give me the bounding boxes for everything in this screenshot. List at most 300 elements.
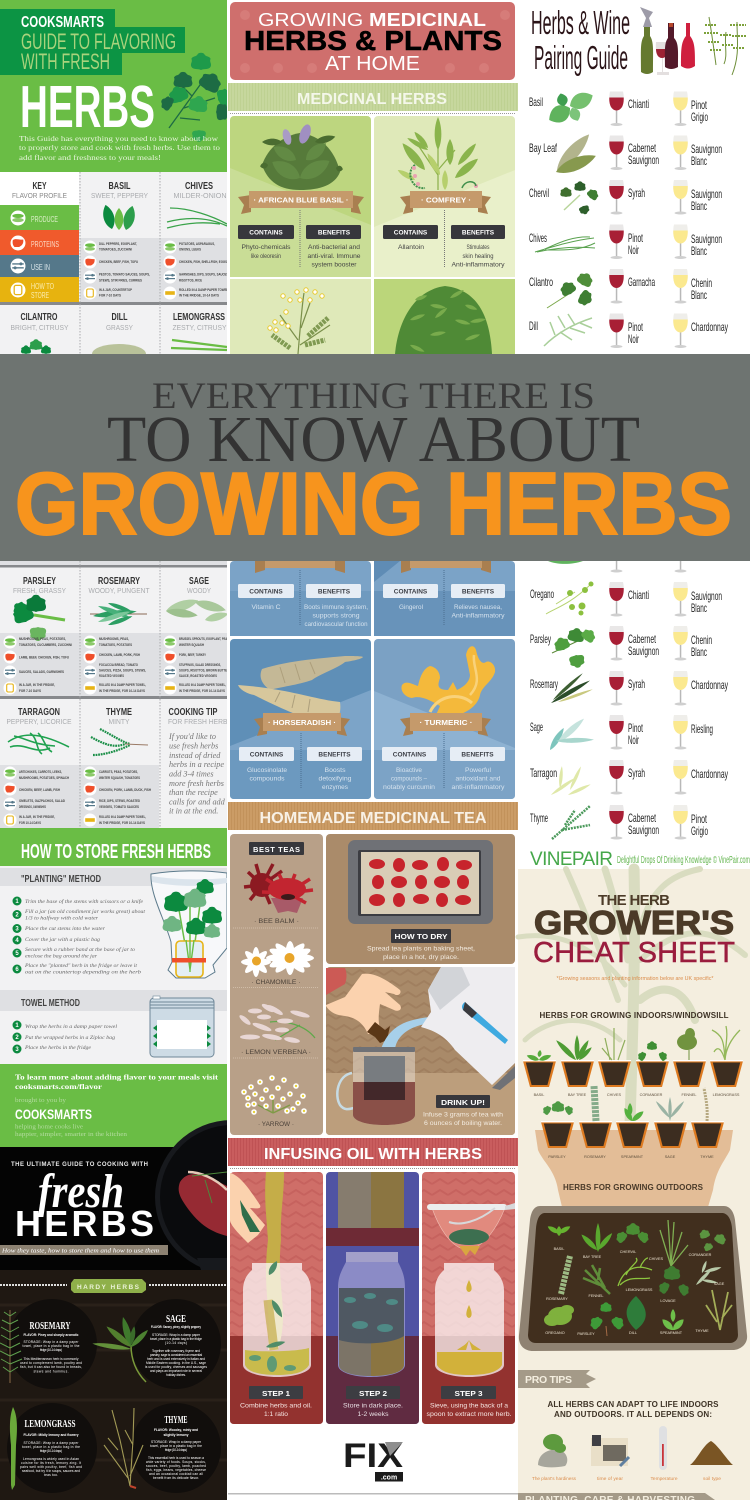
row: rosemary: Rosemary — [530, 677, 558, 691]
towel steps: 1 — [15, 1023, 19, 1029]
cooking tip: it in at the end. — [169, 806, 218, 816]
header: growing medicinal herbs and plants at home: HERBS & PLANTS — [244, 25, 502, 56]
title banner — [0, 354, 750, 561]
step 3 — [422, 1172, 515, 1424]
row: cilantro: Cilantro — [529, 275, 553, 289]
labels: SAGE — [714, 1282, 725, 1286]
icon: chives — [167, 208, 227, 228]
card copy: Gingerol — [399, 605, 423, 611]
row: dill: Dill — [529, 319, 538, 333]
herb: tarragon: IN A JAR, IN THE FRIDGE, — [19, 815, 55, 819]
row: cilantro — [529, 269, 712, 308]
key: use in — [0, 255, 79, 277]
herb card: rosemary: used to complement lamb, poultry and — [20, 1361, 82, 1365]
herb: thyme: CARROTS, PEAS, POTATOES, — [99, 770, 138, 774]
towel steps: Place the herbs in the fridge — [24, 1046, 92, 1051]
label — [391, 929, 451, 943]
herb card: sage: Together with rosemary, thyme and — [152, 1349, 200, 1353]
labels: CORIANDER — [640, 1093, 663, 1097]
herb card: lemongrass: LEMONGRASS — [24, 1418, 76, 1430]
row: sage: Pinot — [628, 721, 643, 735]
labels: THYME — [700, 1155, 714, 1159]
title: HERBS: HERBS — [20, 74, 155, 140]
section band: medicinal herbs: MEDICINAL HERBS — [297, 91, 447, 108]
herb card: sage: STORAGE: Wrap in a damp paper — [152, 1333, 201, 1337]
panel: herbs and wine pairing guide, upper crop: Herbs & Wine — [531, 4, 630, 41]
towel steps: Put the wrapped herbs in a Ziploc bag — [24, 1036, 116, 1041]
planting steps: enclose the bag around the jar — [25, 954, 97, 960]
ribbon label — [400, 191, 491, 214]
step label: STEP 3 — [454, 1389, 482, 1398]
card: turmeric — [374, 639, 515, 799]
row: tarragon: Syrah — [628, 766, 645, 780]
planting steps — [12, 896, 146, 976]
row: parsley: Chenin — [691, 633, 712, 647]
hero title: HERBS: HERBS — [15, 1203, 154, 1244]
labels: OREGANO — [545, 1331, 565, 1335]
cooking tip: add 3-4 times — [169, 770, 214, 778]
column: chives: RISOTTOS, RICE — [179, 278, 202, 282]
labels — [548, 1155, 714, 1159]
column: chives: IN THE FRIDGE, 10-14 DAYS — [179, 294, 219, 298]
raised bed — [519, 1206, 747, 1351]
outdoor pots — [541, 1086, 724, 1159]
contains box: CONTAINS — [394, 230, 428, 236]
intro text: This Guide has everything you need to know about how — [19, 134, 219, 143]
card copy: detoxifying — [318, 776, 352, 782]
step copy — [343, 1404, 403, 1418]
icon: thyme sprig — [104, 1408, 143, 1486]
icon: rosemary sprig — [0, 1310, 22, 1383]
card copy — [383, 768, 504, 791]
card copy: Powerful — [465, 768, 491, 774]
icon: chamomile — [241, 940, 314, 977]
icon: turmeric root — [401, 646, 495, 715]
step label: STEP 1 — [262, 1389, 290, 1398]
herb: rosemary: CHICKEN, LAMB, PORK, FISH — [99, 653, 140, 657]
name: · CHAMOMILE · — [252, 979, 300, 986]
herb card: sage: (10-14 days) — [165, 1341, 187, 1345]
contains box — [383, 225, 438, 239]
card: feverfew, cropped — [230, 279, 371, 354]
planting steps: Secure with a rubber band at the base of jar to — [25, 948, 136, 953]
labels: CHIVES — [649, 1257, 664, 1261]
indoor pots row 1 — [523, 1026, 743, 1097]
row: sage — [530, 715, 713, 752]
subheading: towel method — [0, 990, 227, 1011]
step copy: Store in dark place. — [343, 1404, 403, 1410]
instructions — [423, 1112, 503, 1127]
card copy — [252, 605, 504, 628]
panel: the herb grower's cheat sheet — [518, 869, 750, 1500]
herb: tarragon: TARRAGON — [18, 707, 60, 718]
column: basil: DILL PEPPERS, EGGPLANT, — [99, 242, 137, 246]
row: thyme — [530, 805, 708, 840]
herb card: sage: and plays an important role in several — [150, 1369, 202, 1373]
title lines: GUIDE TO FLAVORING — [21, 29, 176, 54]
planting steps: 6 — [15, 967, 19, 973]
column: chives: CHIVES — [185, 181, 213, 192]
herb: parsley: SAUCES, SALADS, GARNISHES — [19, 670, 64, 674]
herb: sage: IN THE FRIDGE, FOR 10-14 DAYS — [179, 689, 225, 693]
tip labels: time of year — [597, 1476, 624, 1481]
card: comfrey: Stimulates — [466, 245, 490, 251]
ribbon label — [238, 191, 364, 214]
heading: outdoors: HERBS FOR GROWING OUTDOORS — [563, 1183, 704, 1192]
icon: cilantro — [547, 270, 595, 308]
logo: fix.com: .com — [381, 1474, 397, 1482]
herb card: thyme: wide variety of foods. Soups, stocks, — [146, 1460, 206, 1464]
card: horseradish — [230, 639, 371, 799]
planting steps: 2 — [15, 912, 19, 918]
herb: thyme: MINTY — [108, 717, 130, 726]
row: parsley — [530, 626, 712, 669]
title — [533, 892, 735, 969]
herb: rosemary: MUSHROOMS, PEAS, — [99, 637, 129, 641]
herb: tarragon: DRESSINGS, GARNISHES — [19, 805, 46, 809]
card copy: Boots immune system, — [304, 605, 368, 611]
jar base above band — [338, 1172, 404, 1228]
intro text — [19, 134, 220, 162]
intro text: to properly store and cook with fresh herbs. Use them to — [19, 143, 220, 152]
icon: thyme — [91, 729, 148, 755]
cooking tip: more fresh herbs — [169, 779, 224, 788]
footer: cooksmarts credit — [0, 1064, 227, 1147]
panel: how to dry — [326, 834, 515, 964]
icon: sealed jar with herbs — [338, 1252, 405, 1377]
card: african blue basil: Phyto-chemicals — [242, 245, 290, 251]
herb card: sage: herb and is used extensively in Italian and — [147, 1357, 205, 1361]
herb: rosemary: ROLLED IN A DAMP PAPER TOWEL, — [99, 683, 146, 687]
section band: medicinal herbs — [228, 83, 518, 111]
intro text: add flavor and freshness to your meals! — [19, 153, 161, 162]
card: african blue basil: anti-viral. Immune — [308, 254, 361, 260]
title line 1: EVERYTHING THERE IS — [152, 376, 595, 417]
row: chervil: Sauvignon — [691, 187, 722, 201]
key: produce: PRODUCE — [31, 215, 58, 224]
icon: jar — [243, 1260, 311, 1377]
ribbon: planting, care and harvesting — [518, 1493, 715, 1500]
herb: sage: ROLLED IN A DAMP PAPER TOWEL, — [179, 683, 226, 687]
herb card: thyme: FLAVOR: Woodsy, minty and — [154, 1428, 198, 1432]
title: GROWER'S — [534, 904, 734, 941]
cooking tip: instead of dried — [169, 751, 221, 760]
panel: drink up — [326, 967, 515, 1135]
herb: sage: SOUPS, RISOTTOS, BROWN BUTTER — [179, 668, 229, 672]
towel steps: 2 — [15, 1035, 19, 1041]
icon: rock with plant — [538, 1434, 567, 1467]
card: comfrey: Anti-inflammatory — [452, 262, 504, 268]
labels: FENNEL — [682, 1093, 696, 1097]
row: chives: Sauvignon — [691, 232, 722, 246]
labels: BASIL — [534, 1093, 544, 1097]
planting steps: 3 — [15, 926, 19, 932]
step label — [249, 1386, 303, 1399]
instructions — [367, 946, 475, 961]
header: growing medicinal herbs and plants at home — [230, 2, 515, 80]
row: cilantro: Blanc — [691, 288, 707, 302]
herb card: sage: is used for poultry, cheeses and sausages — [145, 1365, 207, 1369]
row: bay leaf: Cabernet — [628, 141, 656, 155]
icon: baking sheet with flowers — [348, 840, 493, 924]
icon: herbs in bagged jar — [151, 871, 227, 978]
herb card: thyme: benefit from its delicate flavor. — [153, 1476, 199, 1480]
row: bay leaf: Bay Leaf — [529, 141, 557, 155]
panel: cooksmarts herb guide, upper crop: KEY — [32, 181, 47, 192]
labels: PARSLEY — [577, 1332, 595, 1336]
benefits box: BENEFITS — [462, 230, 495, 236]
subheading: planting method: "PLANTING" METHOD — [21, 873, 101, 885]
herb card: rosemary: towel, place in a plastic bag in the — [22, 1344, 80, 1348]
herb: sage — [164, 576, 229, 694]
herb: parsley: FOR 7-10 DAYS — [19, 689, 41, 693]
labels: BAY TREE — [583, 1255, 602, 1259]
ribbon label — [400, 713, 491, 736]
key: proteins: PROTEINS — [31, 240, 59, 249]
ribbon fragments — [255, 561, 491, 573]
labels: THYME — [695, 1329, 709, 1333]
icon: tea mug with infuser — [337, 1047, 415, 1125]
herb details background — [80, 238, 227, 302]
card copy: supports strong — [312, 614, 360, 620]
ribbon label: · COMFREY · — [421, 196, 471, 204]
herb: sage: PORK, BEEF, TURKEY — [179, 653, 206, 657]
column: basil: BASIL — [108, 181, 130, 192]
herb: tarragon — [4, 707, 72, 826]
icon: sieve with herbs — [427, 1203, 515, 1256]
labels — [545, 1247, 725, 1336]
step copy: 1-2 weeks — [358, 1412, 388, 1418]
subheading: towel method: TOWEL METHOD — [21, 997, 80, 1009]
partial row: previous pair — [548, 558, 686, 572]
box labels: BENEFITS — [318, 752, 351, 758]
icon: lemongrass — [10, 1407, 17, 1490]
disclaimer: *Growing seasons and planting information below are UK specific* — [556, 976, 714, 982]
box labels: CONTAINS — [393, 752, 427, 758]
herb card: rosemary: stews and hummus. — [34, 1370, 69, 1374]
herb: rosemary: TOMATOES, POTATOES — [99, 643, 132, 647]
row: chervil: Blanc — [691, 199, 707, 213]
box labels — [239, 747, 362, 761]
column: chives: POTATOES, ASPARAGUS, — [179, 242, 215, 246]
herb card: sage: towel, place in a plastic bag in the fridge — [150, 1337, 202, 1341]
panel: best teas — [230, 834, 323, 1135]
herb card: lemongrass: cuisine for its fresh, lemony zing. It — [21, 1461, 81, 1465]
column: chives: ROLLED IN A DAMP PAPER TOWEL, — [179, 288, 229, 292]
icon: basil plant — [260, 123, 343, 190]
icon: tarragon — [550, 766, 591, 797]
row: bay leaf: Sauvignon — [628, 153, 659, 167]
ribbon: pro tips — [518, 1370, 596, 1388]
row: dill — [529, 314, 728, 348]
cards: parsley and ginger, cropped — [230, 561, 515, 636]
icon: chives — [535, 237, 595, 252]
herb: thyme: THYME — [106, 707, 132, 718]
key: use in: USE IN — [31, 263, 50, 272]
row: thyme: Thyme — [530, 811, 548, 825]
herb: parsley: MUSHROOMS, PEAS, POTATOES, — [19, 637, 66, 641]
panel: how to store fresh herbs — [0, 828, 227, 1147]
planting steps: 4 — [15, 938, 19, 944]
herb card: thyme: fish, eggs, beans, vegetables, cheese — [146, 1468, 206, 1472]
logo: fix.com: FIX — [343, 1437, 403, 1475]
herb: parsley — [4, 576, 72, 694]
instructions: place in a hot, dry place. — [383, 955, 459, 961]
step label — [346, 1386, 400, 1399]
column: basil: IN A JAR, COUNTERTOP — [99, 288, 132, 292]
key cell — [0, 172, 79, 205]
herb card: thyme: sauces, beef, poultry, lamb, poached — [146, 1464, 206, 1468]
cooking tip: calls for and add — [169, 798, 226, 806]
labels: PARSLEY — [548, 1155, 566, 1159]
icon: skillet with steak — [155, 1120, 309, 1274]
herb: thyme: WINTER SQUASH, TOMATOES — [99, 776, 140, 780]
herb: thyme: IN THE FRIDGE, FOR 10-14 DAYS — [99, 821, 145, 825]
cooking tip: than the recipe — [169, 788, 218, 797]
row: parsley: Blanc — [691, 645, 707, 659]
row: sage: Sage — [530, 720, 543, 734]
row: oregano: Sauvignon — [691, 589, 722, 603]
row: chives: Blanc — [691, 244, 707, 258]
icon: basil leaf — [545, 88, 596, 127]
step label: STEP 2 — [359, 1389, 387, 1398]
name: · BEE BALM · — [254, 918, 299, 925]
herb: rosemary — [84, 576, 150, 694]
cooking tip: COOKING TIP — [168, 707, 218, 718]
card copy: compounds – — [391, 776, 428, 782]
row: basil — [529, 88, 708, 127]
column: basil: FOR 7-10 DAYS — [99, 294, 121, 298]
pro tips copy: AND OUTDOORS. IT ALL DEPENDS ON: — [554, 1410, 712, 1419]
step 2 — [326, 1172, 419, 1424]
herb card: rosemary: This Mediterranean herb is commonly — [24, 1357, 79, 1361]
card copy: anti-inflammatory — [452, 785, 504, 791]
footer: cooksmarts credit: brought to you by — [15, 1097, 67, 1104]
tip labels — [532, 1476, 722, 1481]
herb: parsley: TOMATOES, CUCUMBERS, ZUCCHINI — [19, 643, 72, 647]
herb card: lemongrass: fridge (10-14 days) — [40, 1449, 62, 1453]
name: · LEMON VERBENA · — [241, 1049, 311, 1056]
icon: horseradish roots — [238, 656, 363, 716]
herb: sage: WOODY — [187, 586, 211, 595]
column: basil: STEWS, STIR FRIES, CURRIES — [99, 278, 142, 282]
icon: calendar — [591, 1435, 629, 1466]
instructions: 6 ounces of boiling water. — [424, 1121, 502, 1127]
row: sage: Riesling — [691, 722, 713, 736]
herb card: lemongrass: FLAVOR: Mildly lemony and flowery — [24, 1433, 79, 1437]
label — [436, 1095, 490, 1108]
card copy: Bioactive — [396, 768, 423, 774]
step copy — [240, 1404, 312, 1418]
icon: comfrey plant — [396, 117, 480, 190]
herb: parsley: IN A JAR, IN THE FRIDGE, — [19, 683, 55, 687]
herb card: sage: holiday dishes. — [166, 1373, 186, 1377]
icon: hand with tea — [326, 968, 401, 1043]
card: african blue basil — [230, 116, 371, 277]
row: rosemary — [530, 671, 728, 706]
icon: white flowers — [268, 288, 330, 354]
row: parsley: Sauvignon — [628, 644, 659, 658]
herb card: thyme: THYME — [164, 1414, 188, 1426]
row heads: cilantro, dill, lemongrass: GRASSY — [106, 323, 133, 332]
title: THE HERB — [598, 892, 670, 909]
panel: herbs and wine pairing guide, upper crop — [518, 0, 750, 354]
section band: infusing oil with herbs — [228, 1138, 518, 1166]
icon: kettle — [421, 967, 515, 1090]
section band: infusing oil with herbs: INFUSING OIL WITH HERBS — [264, 1146, 482, 1163]
herb: tarragon: PEPPERY, LICORICE — [6, 717, 72, 726]
row heads: cilantro, dill, lemongrass: CILANTRO — [20, 312, 58, 323]
header: growing medicinal herbs and plants at home: GROWING MEDICINAL — [258, 9, 486, 30]
planting steps: out on the countertop depending on the herb — [25, 970, 142, 976]
icon: thyme sprigs — [704, 17, 746, 75]
row: basil: Pinot — [691, 98, 707, 112]
card: comfrey — [374, 116, 515, 277]
labels: ROSEMARY — [546, 1297, 568, 1301]
herb card: lemongrass: STORAGE: Wrap in a damp paper — [24, 1441, 79, 1445]
card copy — [247, 768, 352, 791]
card: comfrey: skin healing — [462, 254, 494, 260]
icon: soil pile — [690, 1441, 733, 1465]
card copy: notably curcumin — [383, 785, 435, 791]
planting steps: 1/3 to halfway with cold water — [25, 916, 98, 922]
herb card: sage: Middle Eastern cooking. In the U.S., sage — [146, 1361, 206, 1365]
herb: rosemary: IN THE FRIDGE, FOR 10-14 DAYS — [99, 689, 145, 693]
ribbon label: · HORSERADISH · — [268, 718, 336, 727]
column: chives — [164, 181, 229, 300]
herb: sage: BRUSSEL SPROUTS, EGGPLANT, PEAS — [179, 637, 229, 641]
pro tips copy — [548, 1400, 719, 1419]
row: chives: Chives — [529, 231, 547, 245]
planting steps: Place the cut stems into the water — [24, 927, 105, 932]
section label: hardy herbs: HARDY HERBS — [77, 1284, 140, 1291]
footer: cooksmarts credit: COOKSMARTS — [15, 1106, 92, 1122]
herb card: lemongrass: towel, place in a plastic bag in the — [22, 1445, 80, 1449]
name: · YARROW · — [258, 1121, 294, 1128]
labels: SPEARMINT — [621, 1155, 644, 1159]
icon: bee balm — [244, 864, 313, 913]
row: basil: Chianti — [628, 97, 649, 111]
labels: SPEARMINT — [660, 1331, 683, 1335]
towel steps — [12, 1020, 118, 1054]
herb card: rosemary: fridge (10-14 days) — [40, 1348, 62, 1352]
row: oregano — [530, 582, 722, 616]
benefits box — [306, 225, 361, 239]
icon: jar with oil — [435, 1263, 504, 1377]
tip labels: soil type — [703, 1476, 722, 1481]
row: cilantro: Chenin — [691, 276, 712, 290]
herb: rosemary: SAUCES, PIZZA, SOUPS, STEWS, — [99, 668, 146, 672]
row: parsley: Parsley — [530, 632, 551, 646]
icon: oregano — [546, 582, 594, 616]
step label — [441, 1386, 496, 1399]
panel: herbs and wine pairing guide, upper crop: Pairing Guide — [534, 39, 628, 76]
step copy — [426, 1404, 512, 1418]
herb: thyme: VEGGIES, TOMATO SAUCES — [99, 805, 139, 809]
herb: thyme: ROLLED IN A DAMP PAPER TOWEL, — [99, 815, 146, 819]
footer: cooksmarts credit: helping home cooks live — [15, 1124, 83, 1130]
herb: parsley: FRESH, GRASSY — [13, 586, 66, 595]
row: parsley: Cabernet — [628, 632, 656, 646]
herb: rosemary: ROASTED VEGGIES — [99, 674, 124, 678]
row: basil: Basil — [529, 95, 543, 109]
panel: cooksmarts herb guide, lower crop — [0, 561, 232, 830]
contains box — [238, 225, 294, 239]
icon: lemon verbena — [238, 1002, 315, 1044]
cooking tip: use fresh herbs — [169, 742, 218, 750]
row: dill: Noir — [628, 332, 639, 346]
towel steps: 3 — [15, 1047, 19, 1053]
